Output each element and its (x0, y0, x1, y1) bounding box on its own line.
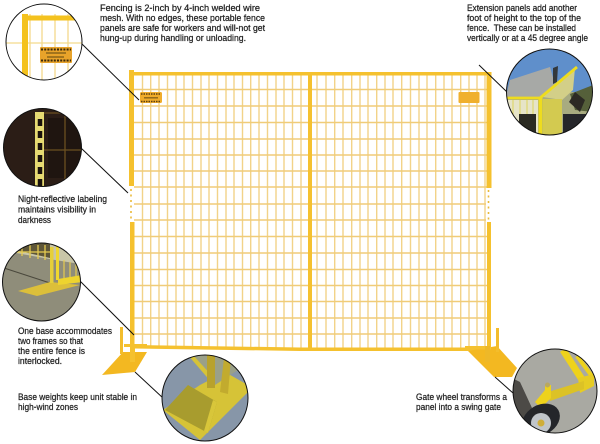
callout photo: interlocking base (2, 242, 81, 322)
text: one base: the entire fence is (18, 346, 85, 356)
text: extension panels: foot of height to the top of the (467, 13, 581, 23)
frame tubes (129, 70, 492, 358)
text: extension panels: Extension panels add another (467, 3, 577, 13)
leader lines (80, 43, 513, 398)
perimeter patrol sign (140, 92, 162, 103)
text: night-reflective labeling: Night-reflective labeling (18, 194, 107, 204)
callout photo: extension panel (505, 48, 595, 137)
text: welded wire mesh: Fencing is 2-inch by 4-inch welded wire (100, 3, 260, 13)
reflective label left (128, 186, 134, 222)
text: gate wheel: panel into a swing gate (416, 402, 501, 412)
text: one base: interlocked. (18, 356, 62, 366)
text: gate wheel: Gate wheel transforms a (416, 392, 507, 402)
text: extension panels (467, 3, 588, 43)
left base plate (102, 327, 147, 375)
text: base weights (18, 392, 137, 412)
welded wire mesh (134, 74, 487, 349)
text: night-reflective labeling: darkness (18, 215, 51, 225)
callout photo: gate wheel (512, 348, 598, 434)
text: gate wheel (416, 392, 507, 412)
text: one base (18, 326, 112, 366)
text: extension panels: fence. These can be installed (467, 23, 576, 33)
text: base weights: high-wind zones (18, 402, 78, 412)
text: night-reflective labeling (18, 194, 107, 225)
fence panel (102, 70, 517, 377)
callout photo: base weight (160, 352, 250, 444)
right base plate (465, 328, 517, 377)
rear of sign (458, 92, 480, 103)
callout photo: night-reflective label (3, 108, 83, 188)
text: welded wire mesh (100, 3, 265, 43)
text: one base: One base accommodates (18, 326, 112, 336)
text: night-reflective labeling: maintains visibility in (18, 204, 96, 214)
text: base weights: Base weights keep unit stable in (18, 392, 137, 402)
text: welded wire mesh: hung-up during handling or unloading. (100, 33, 246, 43)
reflective label right (486, 188, 492, 222)
text: extension panels: vertically or at a 45 degree angle (467, 33, 588, 43)
text: one base: two frames so that (18, 336, 83, 346)
sign in photo (40, 47, 72, 63)
text: welded wire mesh: panels are safe for workers and will-not get (100, 23, 265, 33)
text: welded wire mesh: mesh. With no edges, these portable fence (100, 13, 265, 23)
callout photo: perimeter sign close-up (6, 4, 82, 80)
